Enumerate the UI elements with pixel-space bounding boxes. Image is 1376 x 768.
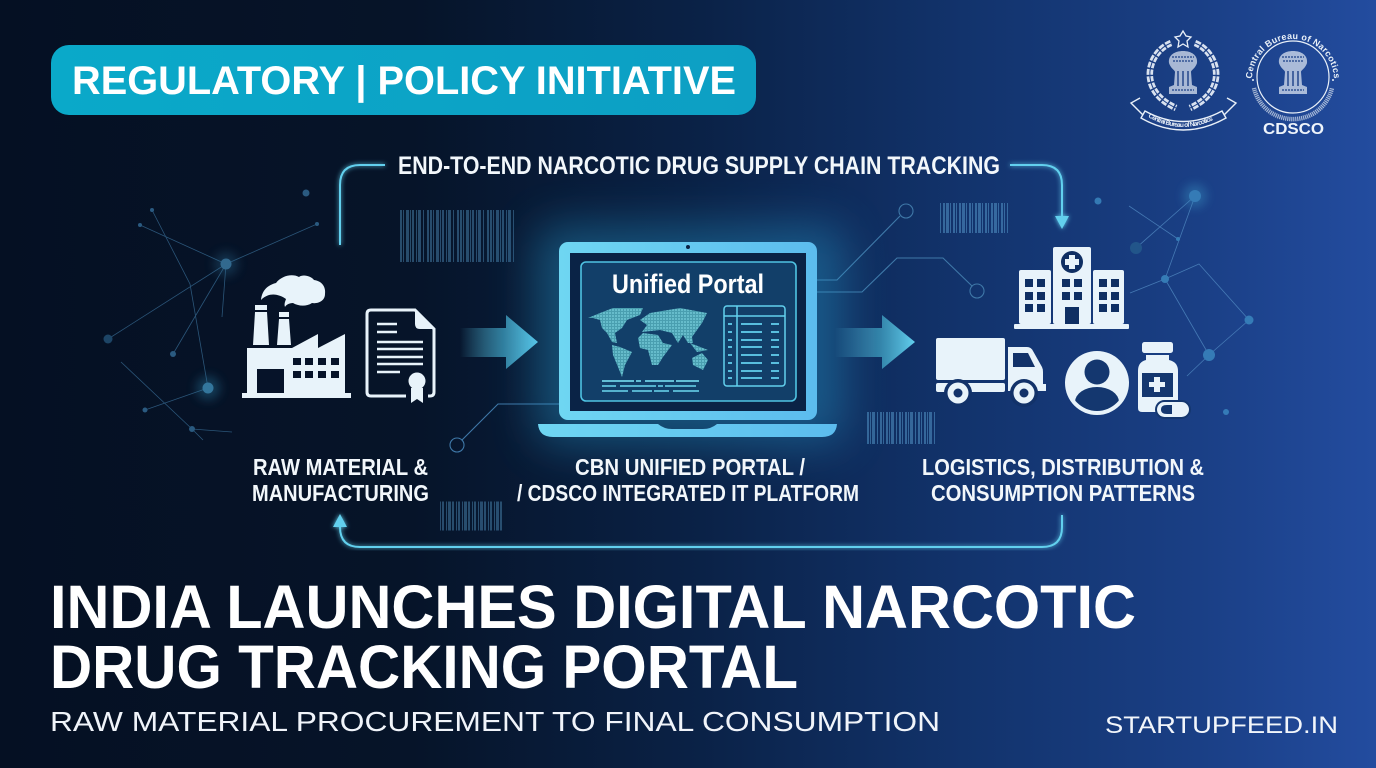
- source credit: STARTUPFEED.IN: [1105, 712, 1338, 739]
- category pill: REGULATORY | POLICY INITIATIVE: [72, 59, 736, 103]
- arrow: bottom loop: [333, 514, 1062, 547]
- icon: laptop portal: [535, 225, 845, 445]
- label: raw material: [252, 454, 429, 506]
- logo: Central Bureau of Narcotics: Central Bureau of Narcotics: [1148, 114, 1213, 127]
- arrow: top loop: [340, 165, 1069, 245]
- icon: certificate document: [367, 310, 434, 403]
- arrow: to portal: [460, 315, 538, 369]
- supply chain heading: END-TO-END NARCOTIC DRUG SUPPLY CHAIN TRACKING: [398, 152, 1000, 180]
- subtitle: RAW MATERIAL PROCUREMENT TO FINAL CONSUMPTION: [50, 706, 940, 737]
- label: portal platform: / CDSCO INTEGRATED IT PLATFORM: [517, 480, 859, 506]
- logo: CDSCO: Central Bureau of Narcotics: [1246, 34, 1339, 78]
- icon: medicine bottle and pill: [1138, 342, 1191, 419]
- logo: CDSCO: CDSCO: [1263, 121, 1324, 138]
- label: logistics: CONSUMPTION PATTERNS: [931, 480, 1195, 506]
- label: logistics: [922, 454, 1204, 506]
- main title: DRUG TRACKING PORTAL: [50, 633, 798, 701]
- circuit traces: [450, 204, 984, 452]
- portal title: Unified Portal: [612, 269, 764, 299]
- network: right: [1094, 184, 1254, 415]
- data table: [724, 306, 785, 386]
- logo: Central Bureau of Narcotics: [1130, 30, 1238, 131]
- network: left: [104, 190, 319, 440]
- icon: hospital: [1014, 247, 1129, 329]
- category pill: [51, 45, 756, 115]
- logo: CDSCO: [1246, 34, 1339, 138]
- arrow: to logistics: [835, 315, 915, 369]
- main title: INDIA LAUNCHES DIGITAL NARCOTIC: [50, 573, 1136, 641]
- label: portal platform: [517, 454, 859, 506]
- icon: factory: [242, 275, 351, 398]
- barcodes: [400, 218, 1008, 516]
- world map: [588, 308, 708, 377]
- map text lines: [602, 381, 699, 391]
- label: portal platform: CBN UNIFIED PORTAL /: [575, 454, 806, 480]
- main title: [50, 573, 1136, 701]
- label: raw material: RAW MATERIAL &: [253, 454, 428, 480]
- icon: delivery truck: [936, 338, 1046, 407]
- label: logistics: LOGISTICS, DISTRIBUTION &: [922, 454, 1204, 480]
- label: raw material: MANUFACTURING: [252, 480, 429, 506]
- icon: person: [1065, 351, 1129, 417]
